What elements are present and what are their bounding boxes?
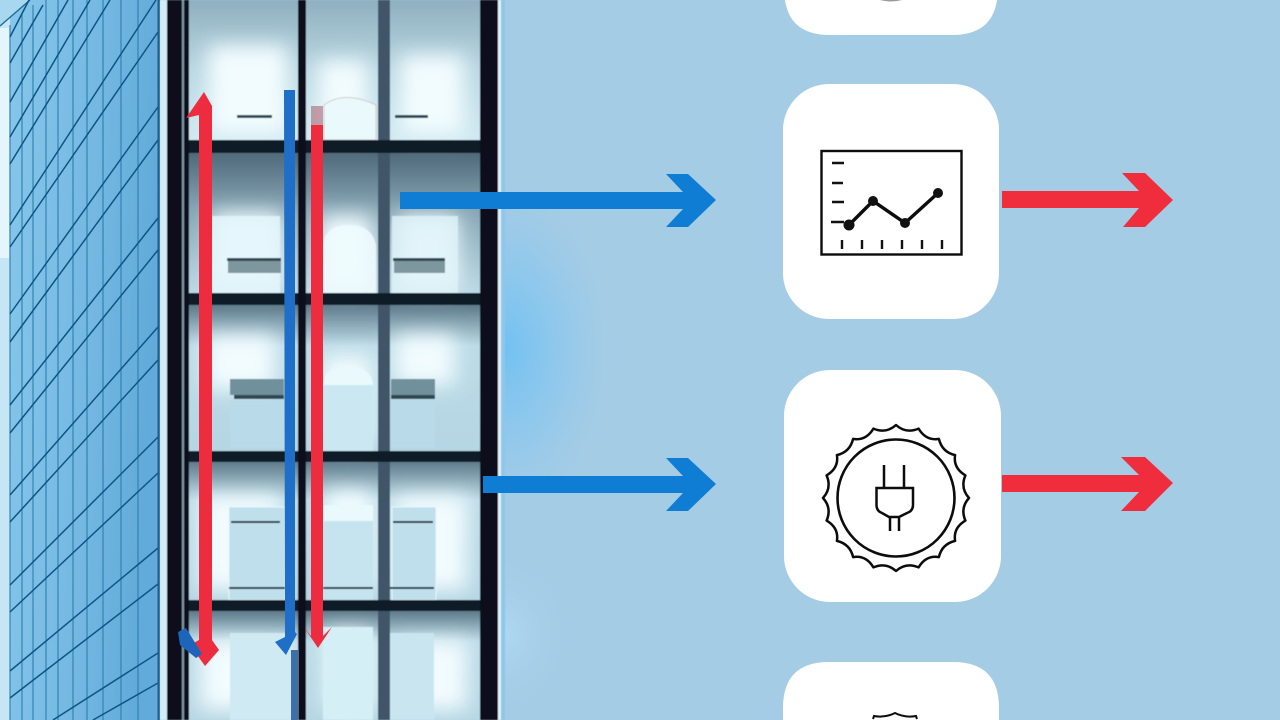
right pale edge (498, 0, 501, 720)
arrow: small blue stub left (178, 628, 202, 658)
glow lower edge (435, 550, 575, 720)
vent slats (227, 115, 445, 589)
icon: line chart (822, 151, 962, 254)
arrow: blue supply upper (400, 174, 716, 227)
icon: bottom seal top edge (873, 713, 917, 719)
black uprights (167, 0, 498, 720)
card: bottom partial (783, 662, 999, 720)
floor slabs (176, 140, 498, 611)
arrow: red riser left (186, 92, 219, 666)
arrow: blue supply lower (483, 458, 716, 511)
card: line chart (783, 84, 999, 319)
arrow: blue duct down (275, 90, 298, 720)
card: plug (784, 370, 1001, 602)
icon: plug in starburst seal (823, 425, 969, 571)
light strip (160, 0, 168, 720)
cells: middle column (306, 0, 378, 720)
pale inner edge (182, 0, 184, 720)
frame backing (167, 0, 498, 720)
cells: left column (188, 0, 300, 720)
card: top partial (785, 0, 997, 35)
right blue edge (501, 0, 505, 720)
window panels (212, 98, 458, 720)
grey mid column (378, 0, 390, 720)
cells: right column (390, 0, 480, 720)
glow beside building (504, 224, 584, 476)
panel: glass facade (0, 0, 160, 720)
panel: building section (160, 0, 505, 720)
arrow: red output lower (1002, 457, 1173, 511)
ceiling light glows (200, 45, 467, 710)
arrow: red riser right (304, 106, 332, 648)
arrow: red output upper (1002, 173, 1173, 227)
